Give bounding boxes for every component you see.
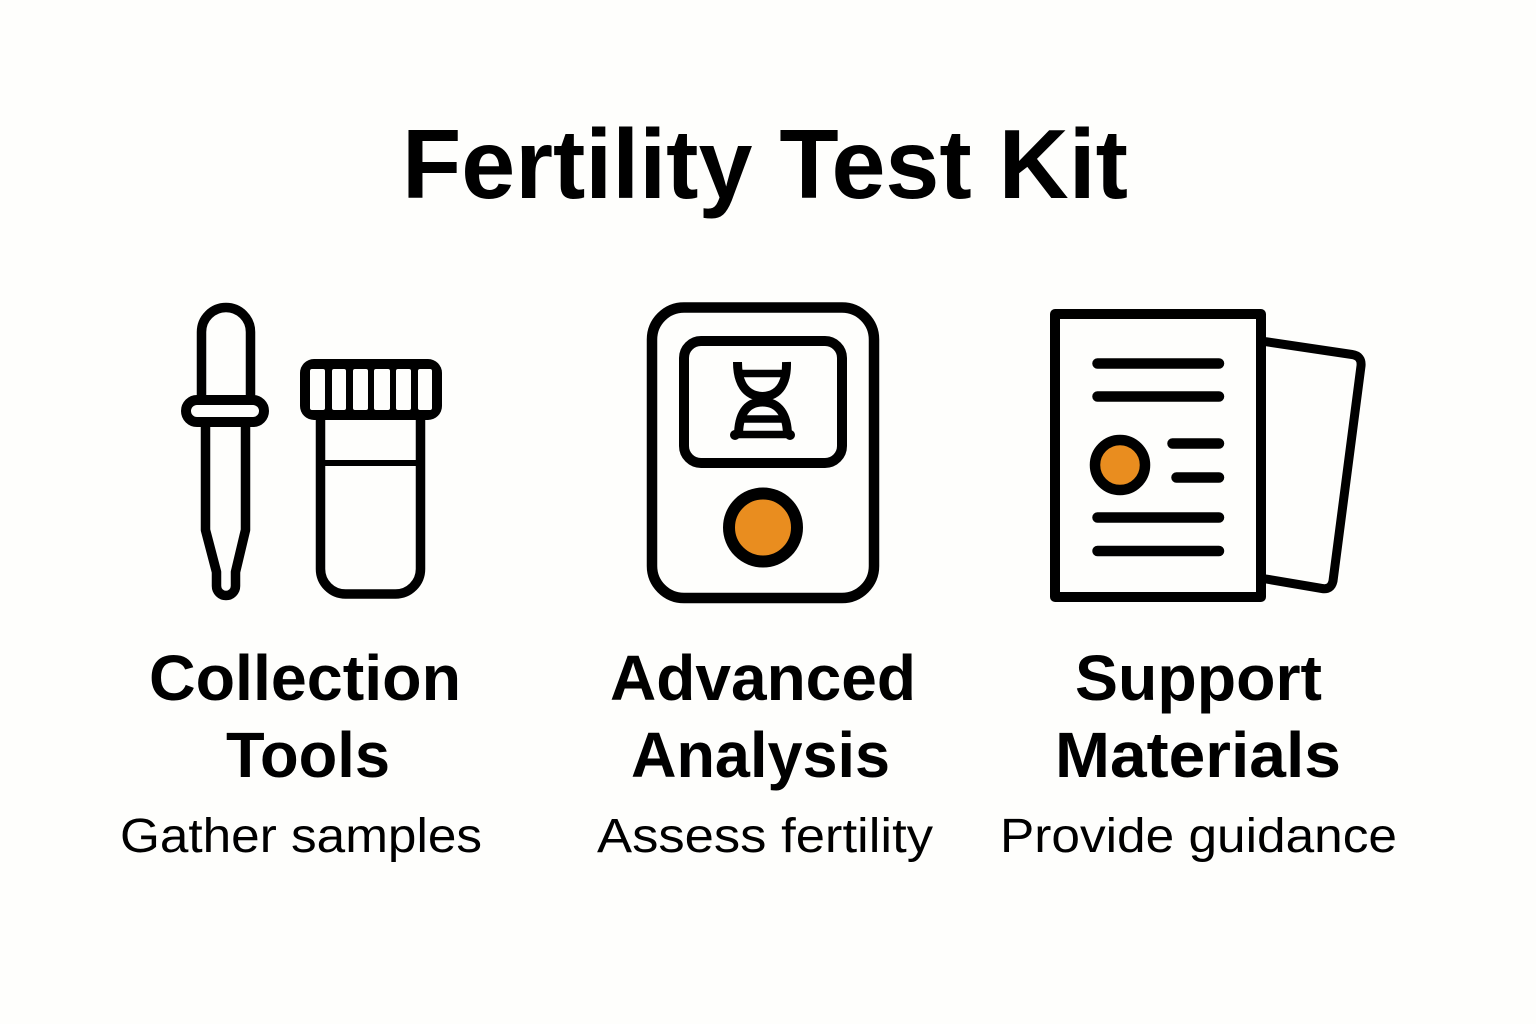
heading: support materials: Support xyxy=(1075,642,1322,714)
icon: analysis device xyxy=(652,308,874,598)
icon: dropper xyxy=(186,307,264,596)
heading: advanced analysis xyxy=(610,642,916,791)
caption: assess fertility: Assess fertility xyxy=(597,810,933,863)
heading: advanced analysis: Analysis xyxy=(631,719,890,791)
icon: orange button xyxy=(729,494,797,562)
heading: support materials xyxy=(1055,642,1341,791)
icon: sample vial xyxy=(300,359,442,594)
heading: support materials: Materials xyxy=(1055,719,1341,791)
title: Fertility Test Kit xyxy=(402,109,1128,219)
icon: orange dot xyxy=(1095,440,1145,490)
heading: collection tools: Tools xyxy=(226,719,390,791)
panel: advanced analysis xyxy=(597,308,933,863)
icon: dna helix xyxy=(730,362,795,440)
heading: collection tools: Collection xyxy=(149,642,461,714)
heading: advanced analysis: Advanced xyxy=(610,642,916,714)
caption: gather samples: Gather samples xyxy=(120,810,482,863)
heading: collection tools xyxy=(149,642,461,791)
panel: collection tools xyxy=(120,307,482,863)
caption: provide guidance: Provide guidance xyxy=(1000,810,1397,863)
panel: support materials xyxy=(1000,314,1397,863)
icon: back card xyxy=(1266,342,1361,589)
icon: document xyxy=(1055,314,1261,597)
